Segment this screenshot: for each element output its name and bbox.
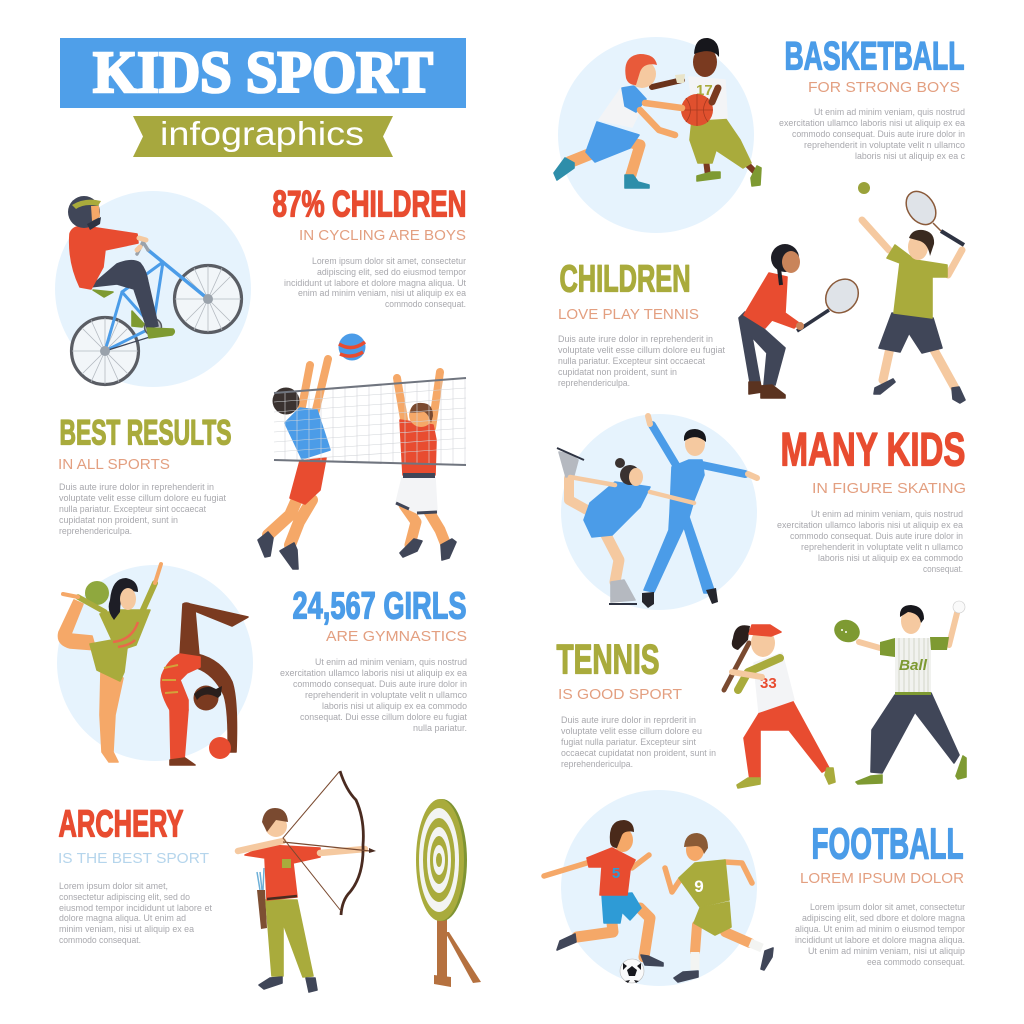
raised arm xyxy=(142,583,155,612)
boy 2 shoes xyxy=(674,948,773,982)
raised legs xyxy=(180,603,248,656)
boy 1 number: 5 xyxy=(612,865,620,882)
body text: aliqua. Ut enim ad minim o eiusmod tempor xyxy=(795,924,965,934)
text block: baseball xyxy=(556,636,716,769)
text block: volleyball xyxy=(58,414,232,536)
body text xyxy=(284,256,467,309)
left player shorts xyxy=(290,458,326,504)
text block: football xyxy=(795,820,965,967)
stand strut xyxy=(445,932,481,983)
text block: tennis players xyxy=(558,258,726,388)
subheading: LOREM IPSUM DOLOR xyxy=(800,871,964,887)
man shoes xyxy=(642,588,718,608)
dark boy hand xyxy=(712,88,718,102)
boy 2 legs xyxy=(695,925,750,952)
body text: exercitation ullamco laboris nisi ut aliquip ex ea xyxy=(777,520,963,530)
body text: adipiscing elit, sed do eiusmod tempor xyxy=(317,267,466,277)
heading: TENNIS xyxy=(556,636,660,682)
rear shoe xyxy=(132,311,144,327)
body text: nulla pariatur. Excepteur sint occaecat xyxy=(59,504,207,514)
body text: laboris nisi ut aliquip ex ea c xyxy=(855,151,966,161)
subheading: IS THE BEST SPORT xyxy=(58,851,209,867)
shoe xyxy=(147,328,174,338)
man jersey xyxy=(880,637,949,695)
red boy front leg xyxy=(628,142,640,178)
man body xyxy=(644,460,715,593)
left player legs xyxy=(268,497,312,545)
shirt xyxy=(245,845,320,900)
head xyxy=(194,686,218,710)
subheading: FOR STRONG BOYS xyxy=(808,80,960,96)
girl standing leg xyxy=(605,533,619,582)
text block: basketball xyxy=(779,34,966,161)
boy 2 arms xyxy=(665,862,752,892)
body text: consequat. Dui esse cillum dolore eu fugiat xyxy=(300,712,468,722)
body text: dolore magna aliqua. Ut enim ad xyxy=(59,913,186,923)
illustration: baseball players xyxy=(724,601,966,788)
body text: exercitation ullamco laboris nisi ut aliquip ex ea xyxy=(280,668,467,678)
dark boy pants xyxy=(690,118,751,168)
text block: figure skating xyxy=(777,422,966,574)
subheading: IN FIGURE SKATING xyxy=(812,481,966,497)
illustration: tennis players xyxy=(739,182,965,403)
girl arms xyxy=(570,477,694,503)
illustration: handstand gymnast xyxy=(161,603,248,765)
body text: commodo consequat. xyxy=(385,299,466,309)
right player legs xyxy=(404,505,446,545)
body text: enim ad minim veniam, nisi ut aliquip ex ea xyxy=(298,288,466,298)
stand base xyxy=(434,975,451,987)
face xyxy=(120,588,136,610)
dark boy shirt xyxy=(689,77,727,120)
right player head xyxy=(409,403,433,427)
girl number: 33 xyxy=(760,675,777,692)
arms xyxy=(238,841,365,853)
chain and crank xyxy=(100,294,213,356)
man arms xyxy=(652,425,745,474)
boy legs xyxy=(883,348,955,388)
body text: nulla pariatur. Excepteur sint occaecat xyxy=(558,356,706,366)
helmet xyxy=(68,196,101,230)
dark boy sleeve xyxy=(675,74,685,83)
body text: voluptate velit esse cillum dolore eu fugiat xyxy=(558,345,726,355)
right player arms xyxy=(397,372,440,428)
boy 2 socks xyxy=(695,943,762,970)
front wheel xyxy=(174,266,242,332)
background circle: football xyxy=(561,790,757,986)
dark boy shins xyxy=(706,160,755,176)
body text xyxy=(561,715,716,769)
volleyball xyxy=(338,334,366,360)
red boy arms xyxy=(640,103,682,135)
body text: Ut enim ad minim veniam, quis nostrud xyxy=(315,657,467,667)
body text: minim veniam, nisi ut aliquip ex ea xyxy=(59,924,194,934)
body text: eea commodo consequat. xyxy=(867,957,965,967)
title banner: KIDS SPORT xyxy=(93,39,433,105)
boy shorts xyxy=(879,313,942,353)
girl shirt xyxy=(754,653,794,712)
man hands xyxy=(648,416,757,478)
body text: reprehenderit in voluptate velit n ullamco xyxy=(804,140,965,150)
girl cap xyxy=(749,625,781,636)
subheading: IN ALL SPORTS xyxy=(58,457,170,473)
dark boy shoes xyxy=(697,166,761,186)
right player shorts xyxy=(396,478,437,513)
target rings xyxy=(416,799,467,921)
subheading: ARE GYMNASTICS xyxy=(326,629,467,645)
boy shoes xyxy=(874,379,965,403)
body text: Duis aute irure dolor in reprderit in xyxy=(561,715,696,725)
boy 1 shirt xyxy=(587,848,635,895)
support legs xyxy=(170,710,188,760)
boy 1 shoes xyxy=(557,934,663,966)
boy shirt xyxy=(887,245,947,318)
left hand xyxy=(63,594,78,597)
dark boy arm xyxy=(652,80,682,87)
man pants xyxy=(871,693,959,773)
body text: reprehendericulpa. xyxy=(59,526,132,536)
body text xyxy=(59,881,213,945)
left player arms xyxy=(301,359,328,414)
body text: cupidatat non proident, sunt in xyxy=(59,515,178,525)
glove xyxy=(831,616,863,646)
body text: Ut enim ad minim veniam, quis nostrud xyxy=(811,509,963,519)
ball xyxy=(85,581,109,605)
shoes xyxy=(259,977,317,992)
body text: commodo consequat. xyxy=(59,935,141,945)
man head xyxy=(684,429,706,456)
illustration: archer xyxy=(238,771,376,992)
background circle: figure skating xyxy=(561,414,757,610)
quiver xyxy=(257,868,267,929)
girl blade xyxy=(609,603,637,605)
back arm xyxy=(197,654,236,752)
bike frame xyxy=(105,250,208,351)
hair xyxy=(194,686,222,700)
body text xyxy=(777,509,963,574)
boy 2 shirt xyxy=(679,860,729,907)
girl arm xyxy=(732,672,762,677)
football xyxy=(620,959,644,983)
boy head xyxy=(908,230,934,260)
subtitle ribbon xyxy=(133,115,393,157)
red boy shoes xyxy=(554,158,649,188)
illustration: cyclist xyxy=(68,196,242,384)
left arm sleeve xyxy=(78,597,105,612)
girl legs xyxy=(739,312,785,385)
body text: consectetur adipiscing elit, sed do xyxy=(59,892,190,902)
handlebar xyxy=(137,242,148,254)
jersey number: 17 xyxy=(696,82,713,99)
bat xyxy=(724,643,749,690)
body text: incididunt ut labore et dolore magna aliqua. Ut xyxy=(284,278,467,288)
red boy rear leg xyxy=(570,152,595,162)
pocket xyxy=(282,859,291,868)
subheading: IN CYCLING ARE BOYS xyxy=(299,228,466,244)
text block: cycling xyxy=(272,184,467,309)
heading: BEST RESULTS xyxy=(60,414,232,452)
girl pants xyxy=(744,700,829,780)
body text: reprehenderit in voluptate velit n ullamco xyxy=(305,690,467,700)
body text: occaecat cupidatat non proident, sunt in xyxy=(561,748,716,758)
subheading: IS GOOD SPORT xyxy=(558,687,682,703)
leotard detail xyxy=(162,665,178,693)
body text: reprehenderit in voluptate velit n ullamco xyxy=(801,542,963,552)
red ball xyxy=(209,737,231,759)
boy 1 head xyxy=(610,820,634,852)
girl ponytail xyxy=(732,625,750,650)
body text xyxy=(558,334,726,388)
girl sleeve xyxy=(738,658,780,690)
trousers xyxy=(266,900,313,977)
heading: 24,567 GIRLS xyxy=(292,586,466,628)
body text: laboris nisi ut aliquip ex ea commodo xyxy=(322,701,467,711)
body text xyxy=(795,902,965,967)
girl head xyxy=(751,629,775,657)
body text: Duis aute irure dolor in reprehenderit in xyxy=(59,482,214,492)
dress xyxy=(90,610,150,681)
left player head xyxy=(272,388,300,414)
body text: fugiat nulla pariatur. Excepteur sint xyxy=(561,737,697,747)
girl head xyxy=(771,244,800,285)
girl dress xyxy=(584,482,650,537)
girl hand xyxy=(796,322,804,330)
illustration: football players xyxy=(544,820,773,983)
volleyball net xyxy=(274,377,466,465)
head xyxy=(262,808,288,837)
man head xyxy=(900,605,924,634)
stand post xyxy=(437,918,447,978)
boy racket xyxy=(900,186,964,245)
body text: consequat. xyxy=(923,564,963,574)
body text: voluptate velit esse cillum dolore eu xyxy=(561,726,702,736)
right player shirt xyxy=(400,420,436,478)
body text xyxy=(59,482,227,536)
right player shoes xyxy=(400,539,456,560)
boy 1 shorts xyxy=(602,893,641,923)
body text: voluptate velit esse cillum dolore eu fugiat xyxy=(59,493,227,503)
bow xyxy=(340,771,363,915)
boy 2 number: 9 xyxy=(694,877,704,896)
body text: reprehendericulpa. xyxy=(561,759,633,769)
girl head xyxy=(615,458,643,486)
saddle xyxy=(93,290,113,297)
boy 2 head xyxy=(684,833,708,861)
body text xyxy=(280,657,468,733)
body text: Lorem ipsum dolor sit amet, consectetur xyxy=(810,902,965,912)
subheading: LOVE PLAY TENNIS xyxy=(558,307,699,323)
illustration: rhythmic gymnast xyxy=(58,564,161,762)
body text: exercitation ullamco laboris nisi ut aliquip ex ea xyxy=(779,118,965,128)
baseball xyxy=(953,601,965,613)
girl boots xyxy=(749,382,785,398)
leotard xyxy=(161,654,200,710)
girl racket xyxy=(797,273,865,331)
girl boot xyxy=(611,580,635,602)
boy 2 shorts xyxy=(694,902,731,935)
bow string xyxy=(283,772,341,911)
body text: Lorem ipsum dolor sit amet, xyxy=(59,881,168,891)
illustration: figure skaters xyxy=(557,416,757,608)
body text: nulla pariatur. xyxy=(413,723,467,733)
man shoes xyxy=(856,756,966,784)
trousers xyxy=(90,261,158,328)
illustration: archery target xyxy=(416,799,481,987)
raised leg xyxy=(58,600,96,650)
body text: Duis aute irure dolor in reprehenderit in xyxy=(558,334,713,344)
body text: commodo consequat. Duis aute irure dolor in xyxy=(792,129,965,139)
body text: Ut enim ad minim veniam, quis nostrud xyxy=(814,107,965,117)
illustration: basketball players xyxy=(554,38,761,188)
body text: incididunt ut labore et dolore magna aliqua. xyxy=(795,935,965,945)
rear wheel xyxy=(72,318,138,384)
illustration: volleyball players and net xyxy=(258,334,466,569)
red boy shorts xyxy=(586,122,639,162)
girl top xyxy=(744,273,799,328)
subtitle ribbon: infographics xyxy=(160,115,364,152)
tennis ball xyxy=(858,182,870,194)
body text: commodo consequat. Duis aute irure dolor in xyxy=(293,679,467,689)
raised hand xyxy=(155,564,161,583)
body text: adipiscing elit, sed dbore et dolore magna xyxy=(802,913,965,923)
red boy shirt xyxy=(599,87,645,127)
heading: CHILDREN xyxy=(560,258,690,300)
left player shoes xyxy=(258,532,298,569)
girl raised skate xyxy=(557,448,584,477)
body text: Ut enim ad minim veniam, nisi ut aliquip xyxy=(808,946,965,956)
background circle: cycling xyxy=(55,191,251,387)
blue sleeve xyxy=(622,86,646,112)
body text: commodo consequat. Duis aute irure dolor in xyxy=(790,531,963,541)
body text xyxy=(779,107,966,161)
boy 1 legs xyxy=(577,908,650,957)
body text: cupidatat non proident, sunt in xyxy=(558,367,677,377)
man arms xyxy=(859,613,957,648)
dress flame detail xyxy=(113,622,138,647)
dark boy head xyxy=(693,38,719,77)
belt xyxy=(267,896,297,899)
body text: Lorem ipsum dolor sit amet, consectetur xyxy=(312,256,466,266)
arrow xyxy=(283,842,376,853)
boy arms xyxy=(862,220,962,275)
background circle: basketball xyxy=(558,37,754,233)
hair xyxy=(109,578,138,620)
boy 1 arms xyxy=(544,855,649,876)
heading: 87% CHILDREN xyxy=(272,184,466,224)
text block: archery xyxy=(58,804,213,945)
basketball xyxy=(681,94,713,126)
text block: gymnastics xyxy=(280,586,468,733)
background circle: gymnastics xyxy=(57,565,253,761)
left player shirt xyxy=(285,408,330,459)
girl raised leg xyxy=(569,478,587,510)
red boy head xyxy=(625,54,657,88)
body text: reprehendericulpa. xyxy=(558,378,630,388)
body text: eiusmod tempor incididunt ut labore et xyxy=(59,903,213,913)
jacket xyxy=(70,226,138,289)
standing leg xyxy=(100,670,123,762)
man jersey: Ball xyxy=(899,657,928,674)
hands xyxy=(137,238,146,250)
feet xyxy=(170,758,195,765)
girl shoes xyxy=(737,768,835,788)
body text: laboris nisi ut aliquip ex ea commodo xyxy=(818,553,963,563)
heading: ARCHERY xyxy=(58,804,184,846)
